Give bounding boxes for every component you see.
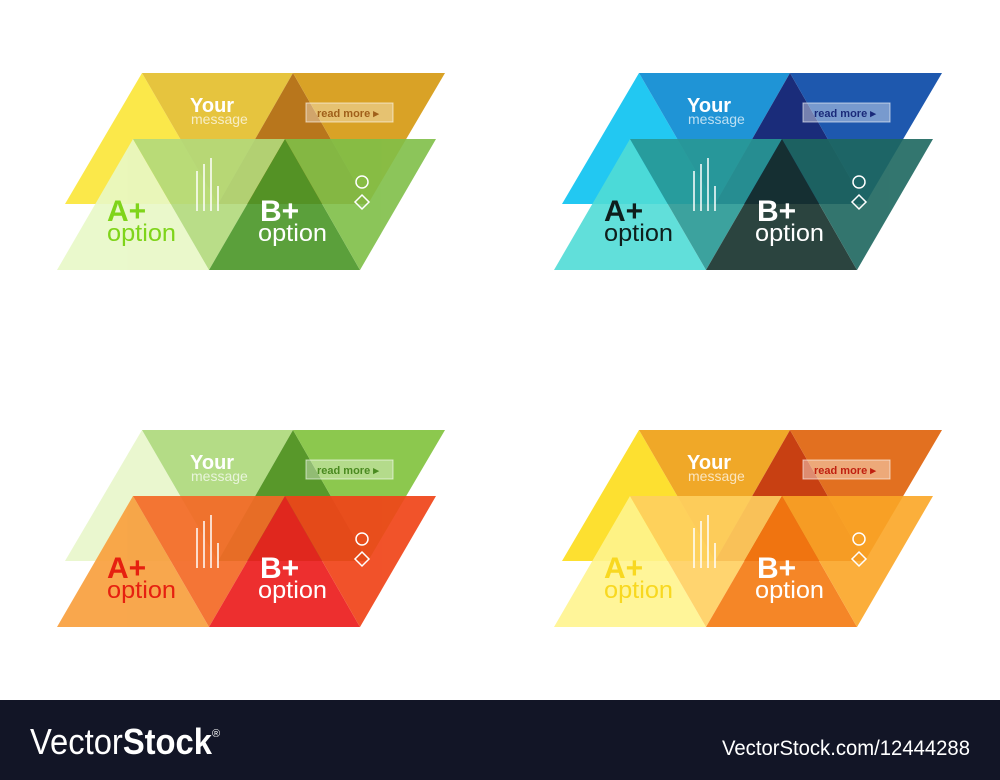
button: read more bbox=[803, 460, 890, 479]
text: your message bbox=[190, 95, 248, 127]
panel: yellow-green top-left bbox=[57, 73, 445, 270]
text: A+ option: A+ bbox=[107, 195, 146, 228]
bottom row triangles bbox=[57, 496, 436, 627]
text: A+ option: option bbox=[107, 220, 176, 247]
icon: bars bbox=[694, 515, 715, 568]
text: B+ option bbox=[755, 195, 824, 247]
panel: orange-yellow bottom-right bbox=[554, 430, 942, 627]
logo: VectorStock: VectorStock bbox=[30, 721, 213, 762]
text: your message: Your bbox=[190, 95, 234, 117]
bottom row triangles bbox=[554, 496, 933, 627]
text: B+ option: option bbox=[258, 220, 327, 247]
bottom row triangles bbox=[57, 139, 436, 270]
button: read more: read more ▸ bbox=[814, 465, 876, 477]
text: B+ option: option bbox=[258, 577, 327, 604]
button: read more: read more ▸ bbox=[814, 108, 876, 120]
text: your message: Your bbox=[190, 452, 234, 474]
text: A+ option: option bbox=[107, 577, 176, 604]
icon: circle and diamond bbox=[355, 176, 369, 209]
text: your message bbox=[687, 95, 745, 127]
text: A+ option bbox=[604, 195, 673, 247]
registered mark: ® bbox=[212, 728, 220, 740]
top row triangles bbox=[65, 430, 445, 561]
footer bar bbox=[0, 700, 1000, 780]
text: A+ option bbox=[604, 552, 673, 604]
icon: bars bbox=[197, 515, 218, 568]
text: your message bbox=[687, 452, 745, 484]
panel: blue-teal top-right bbox=[554, 73, 942, 270]
text: B+ option: B+ bbox=[260, 552, 299, 585]
text: your message: message bbox=[191, 468, 248, 484]
text: your message: message bbox=[191, 111, 248, 127]
text: A+ option bbox=[107, 552, 176, 604]
icon: circle and diamond bbox=[852, 176, 866, 209]
text: B+ option: B+ bbox=[260, 195, 299, 228]
text: B+ option: option bbox=[755, 577, 824, 604]
bottom row triangles bbox=[554, 139, 933, 270]
text: B+ option: option bbox=[755, 220, 824, 247]
text: A+ option: option bbox=[604, 220, 673, 247]
text: your message bbox=[190, 452, 248, 484]
text: A+ option: option bbox=[604, 577, 673, 604]
icon: bars bbox=[694, 158, 715, 211]
text: B+ option bbox=[258, 552, 327, 604]
button: read more: read more ▸ bbox=[317, 108, 379, 120]
icon: circle and diamond bbox=[355, 533, 369, 566]
text: B+ option: B+ bbox=[757, 552, 796, 585]
text: your message: Your bbox=[687, 95, 731, 117]
text: B+ option: B+ bbox=[757, 195, 796, 228]
text: B+ option bbox=[755, 552, 824, 604]
top row triangles bbox=[65, 73, 445, 204]
text: your message: message bbox=[688, 468, 745, 484]
text: B+ option bbox=[258, 195, 327, 247]
text: A+ option bbox=[107, 195, 176, 247]
text: A+ option: A+ bbox=[604, 552, 643, 585]
text: A+ option: A+ bbox=[107, 552, 146, 585]
top row triangles bbox=[562, 430, 942, 561]
text: your message: Your bbox=[687, 452, 731, 474]
icon: bars bbox=[197, 158, 218, 211]
button: read more: read more ▸ bbox=[317, 465, 379, 477]
text: A+ option: A+ bbox=[604, 195, 643, 228]
text: your message: message bbox=[688, 111, 745, 127]
icon: circle and diamond bbox=[852, 533, 866, 566]
button: read more bbox=[803, 103, 890, 122]
button: read more bbox=[306, 460, 393, 479]
top row triangles bbox=[562, 73, 942, 204]
footer url: VectorStock.com/12444288 bbox=[722, 737, 970, 760]
panel: green-red bottom-left bbox=[57, 430, 445, 627]
button: read more bbox=[306, 103, 393, 122]
